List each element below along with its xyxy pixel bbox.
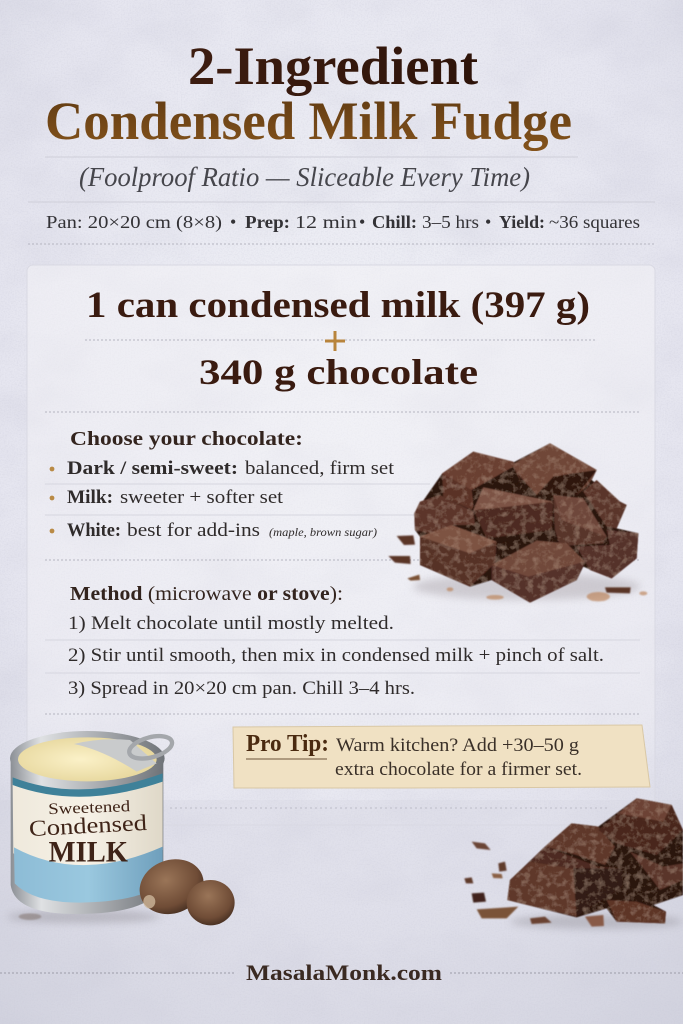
icon: condensed milk can (7, 731, 235, 925)
can label text (28, 798, 148, 868)
recipe facts line: Pan: 20×20 cm (8×8) (46, 212, 222, 233)
can label text: Sweetened (48, 798, 130, 818)
ratio formula: 340 g chocolate (199, 352, 478, 392)
ratio formula (85, 285, 595, 392)
subtitle: (Foolproof Ratio — Sliceable Every Time) (79, 162, 530, 192)
main panel (27, 265, 655, 825)
method (45, 583, 640, 699)
icon: nutmegs (132, 850, 235, 925)
chocolate choices: Milk: (67, 488, 113, 508)
chocolate choices: best for add-ins (127, 521, 260, 541)
chocolate choices: White: (67, 521, 121, 541)
recipe facts line: • (230, 212, 236, 232)
chocolate choices: Dark / semi-sweet: (67, 459, 238, 479)
pro tip callout (233, 725, 650, 788)
chocolate choices (45, 428, 430, 541)
method: 2) Stir until smooth, then mix in condensed milk + pinch of salt. (68, 646, 604, 666)
recipe facts line: Chill: (372, 212, 417, 232)
icon: chocolate pile (388, 443, 647, 603)
method: Method (microwave or stove): (70, 583, 343, 605)
method: 1) Melt chocolate until mostly melted. (68, 614, 394, 634)
recipe facts line: 3–5 hrs (422, 212, 479, 232)
can label text: Condensed (28, 810, 148, 841)
recipe facts line: 12 min (295, 212, 357, 232)
recipe facts line: Prep: (245, 212, 290, 232)
recipe facts line: • (359, 212, 365, 232)
icon: chocolate chunks lower right (464, 798, 683, 929)
pro tip callout: extra chocolate for a firmer set. (335, 759, 582, 780)
chocolate choices: Choose your chocolate: (70, 428, 303, 450)
title: Condensed Milk Fudge (45, 91, 572, 151)
pro tip callout: Warm kitchen? Add +30–50 g (336, 735, 580, 756)
title (45, 36, 572, 151)
can label text: MILK (49, 836, 128, 868)
plus sign (325, 331, 345, 351)
recipe facts line (46, 212, 640, 233)
chocolate choices: (maple, brown sugar) (269, 525, 377, 539)
chocolate choices: balanced, firm set (245, 459, 395, 479)
method: 3) Spread in 20×20 cm pan. Chill 3–4 hrs. (68, 679, 415, 699)
recipe facts line: ~36 squares (549, 212, 640, 232)
recipe facts line: Yield: (499, 212, 545, 232)
pro tip callout: Pro Tip: (246, 731, 329, 757)
chocolate choices: sweeter + softer set (120, 488, 284, 508)
title: 2-Ingredient (188, 36, 478, 96)
recipe facts line: • (485, 212, 491, 232)
ratio formula: 1 can condensed milk (397 g) (86, 285, 590, 326)
footer website: MasalaMonk.com (246, 960, 442, 985)
